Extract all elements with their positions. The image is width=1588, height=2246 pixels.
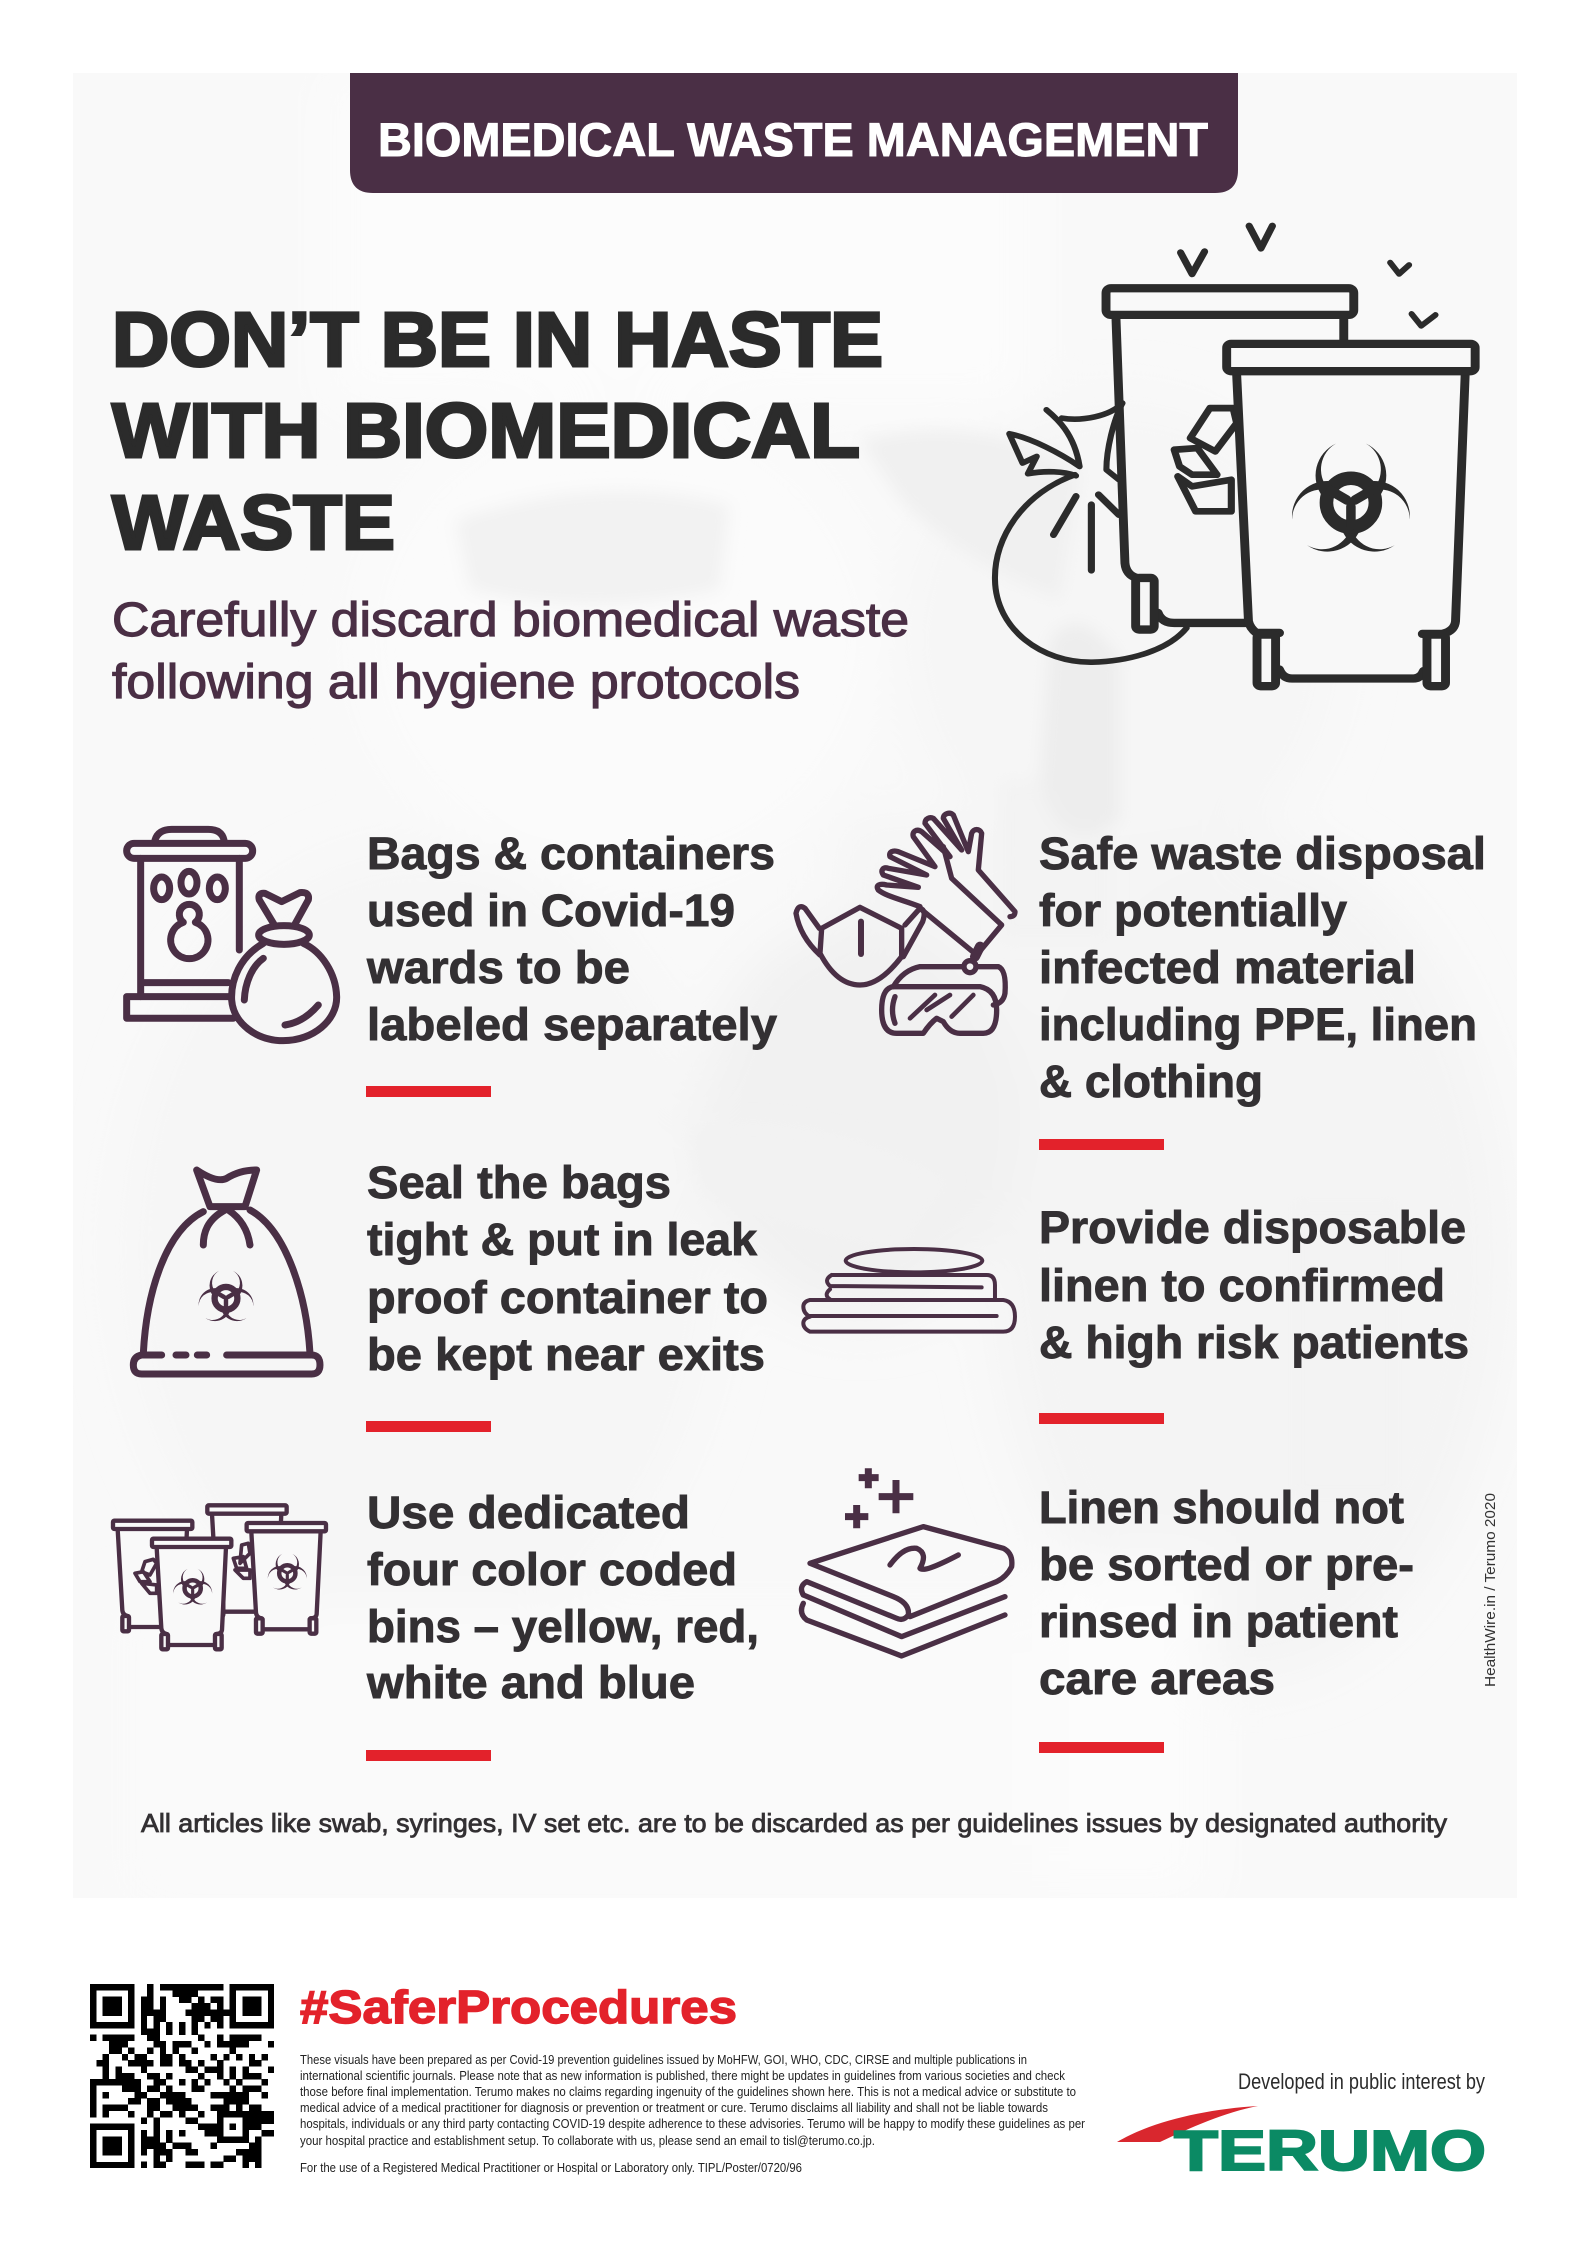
main title: DON’T BE IN HASTE — [112, 297, 883, 383]
text — [1039, 1202, 1469, 1368]
text: bins – yellow, red, — [367, 1601, 759, 1652]
item: safe waste disposal — [796, 813, 1486, 1150]
subtitle: following all hygiene protocols — [112, 656, 800, 709]
text: Provide disposable — [1039, 1202, 1466, 1253]
text: tight & put in leak — [367, 1214, 758, 1265]
icon: mask, gloves and goggles — [796, 813, 1015, 1033]
red rule — [366, 1086, 491, 1097]
text — [1039, 828, 1486, 1107]
disclaimer text — [300, 2053, 1085, 2175]
icon: bins and waste bag — [995, 226, 1475, 686]
red rule — [366, 1750, 491, 1761]
text: care areas — [1039, 1653, 1275, 1704]
text — [367, 1157, 768, 1380]
text: Bags & containers — [367, 828, 775, 879]
subtitle — [112, 594, 909, 709]
header banner — [350, 73, 1238, 193]
text: for potentially — [1039, 885, 1347, 936]
red rule — [1039, 1139, 1164, 1150]
icon: linen stack — [803, 1249, 1015, 1332]
text: & high risk patients — [1039, 1317, 1469, 1368]
subtitle: Carefully discard biomedical waste — [112, 594, 909, 647]
text: labeled separately — [367, 999, 777, 1050]
main title — [112, 297, 883, 566]
disclaimer text: those before final implementation. Terumo makes no claims regarding ingenuity of the guidelines shown here. This is not a medical advice or substitute to — [300, 2085, 1076, 2099]
text — [366, 1487, 759, 1708]
text: white and blue — [366, 1657, 695, 1708]
developed by note: Developed in public interest by — [1238, 2069, 1485, 2094]
Terumo logo: TERUMO — [1174, 2119, 1486, 2183]
text: Use dedicated — [367, 1487, 690, 1538]
header banner: BIOMEDICAL WASTE MANAGEMENT — [378, 113, 1208, 166]
icon: folded towels — [801, 1468, 1012, 1656]
icon: biohazard bag — [133, 1170, 320, 1374]
text: wards to be — [366, 942, 630, 993]
text: Safe waste disposal — [1039, 828, 1486, 879]
item: color coded bins — [113, 1487, 759, 1761]
main title: WASTE — [112, 480, 395, 566]
text: used in Covid-19 — [367, 885, 735, 936]
Terumo logo — [1117, 2106, 1486, 2183]
panel footnote: All articles like swab, syringes, IV set etc. are to be discarded as per guidelines issues by designated authority — [141, 1808, 1447, 1838]
text: be kept near exits — [367, 1329, 765, 1380]
item: seal the bags — [133, 1157, 768, 1432]
text — [1039, 1482, 1414, 1704]
text: linen to confirmed — [1039, 1260, 1445, 1311]
icon: four bins — [113, 1505, 326, 1649]
text: Linen should not — [1039, 1482, 1404, 1533]
disclaimer text: your hospital practice and establishment setup. To collaborate with us, please send an email to tisl@terumo.co.jp. — [300, 2134, 875, 2148]
text: be sorted or pre- — [1039, 1539, 1414, 1590]
text: including PPE, linen — [1039, 999, 1477, 1050]
background photo panel — [134, 416, 1512, 1680]
disclaimer text: hospitals, individuals or any third party contacting COVID-19 despite adherence to these advisories. Terumo will be happy to modify these guidelines as per — [300, 2117, 1085, 2131]
item: linen not sorted — [801, 1468, 1414, 1753]
text: rinsed in patient — [1039, 1596, 1398, 1647]
disclaimer text: medical advice of a medical practitioner for diagnosis or prevention or treatment or cure. Terumo disclaims all liability and shall not be liable towards — [300, 2101, 1048, 2115]
text: & clothing — [1039, 1056, 1263, 1107]
disclaimer text: For the use of a Registered Medical Practitioner or Hospital or Laboratory only. TIPL/Poster/0720/96 — [300, 2161, 802, 2175]
main title: WITH BIOMEDICAL — [112, 388, 860, 474]
text — [366, 828, 777, 1050]
text: infected material — [1039, 942, 1416, 993]
red rule — [1039, 1742, 1164, 1753]
credit line: HealthWire.in / Terumo 2020 — [1482, 1493, 1499, 1687]
red rule — [366, 1421, 491, 1432]
disclaimer text: international scientific journals. Please note that as new information is published, there might be updates in guidelines from various societies and check — [300, 2069, 1066, 2083]
disclaimer text: These visuals have been prepared as per Covid-19 prevention guidelines issued by MoHFW, GOI, WHO, CDC, CIRSE and multiple publications in — [300, 2053, 1027, 2067]
red rule — [1039, 1413, 1164, 1424]
QR code — [90, 1984, 274, 2168]
hashtag: #SaferProcedures — [300, 1981, 737, 2033]
text: four color coded — [367, 1544, 737, 1595]
item: bags and containers — [127, 828, 777, 1097]
text: Seal the bags — [367, 1157, 671, 1208]
item: disposable linen — [803, 1202, 1469, 1424]
icon: container and bag — [127, 829, 337, 1041]
text: proof container to — [367, 1272, 768, 1323]
